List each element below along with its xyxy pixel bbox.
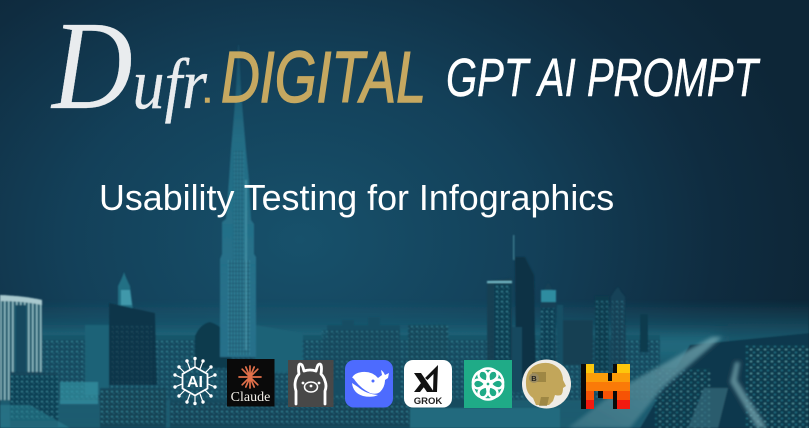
icon: golden android profile: B	[531, 374, 537, 383]
dark tower 2	[195, 322, 232, 368]
logo: gold dot: .	[204, 81, 211, 108]
icon: AI chip: AI	[187, 374, 203, 391]
dome tower	[118, 272, 133, 310]
low-rise left foreground	[10, 372, 58, 427]
icon: DeepSeek whale	[345, 360, 393, 408]
icon row: AI model logos	[173, 357, 630, 409]
icon: Claude	[227, 359, 274, 406]
icon: AI chip	[173, 357, 217, 405]
dark glass tower	[109, 303, 157, 385]
icon: Ollama llama	[288, 360, 334, 407]
lower middle foreground	[170, 400, 500, 428]
icon: Claude: Claude	[231, 390, 270, 405]
right foreground district	[640, 333, 809, 428]
icon: ChatGPT	[464, 360, 512, 408]
left stadium-like building	[0, 295, 42, 400]
right towers	[487, 278, 512, 388]
icon: Mistral pixel M	[581, 364, 630, 409]
Burj tower	[220, 45, 256, 357]
icon: Grok: GROK	[414, 396, 442, 407]
brand logo: Dufr.DIGITAL	[50, 0, 426, 136]
icon: golden android profile	[522, 360, 571, 408]
logo: signature Dufr: Dufr	[50, 0, 208, 136]
highway	[568, 337, 722, 428]
title: Usability Testing for Infographics	[99, 178, 614, 218]
logo: DIGITAL: DIGITAL	[221, 38, 426, 118]
distant city band	[40, 335, 660, 400]
icon: Grok	[404, 360, 452, 408]
